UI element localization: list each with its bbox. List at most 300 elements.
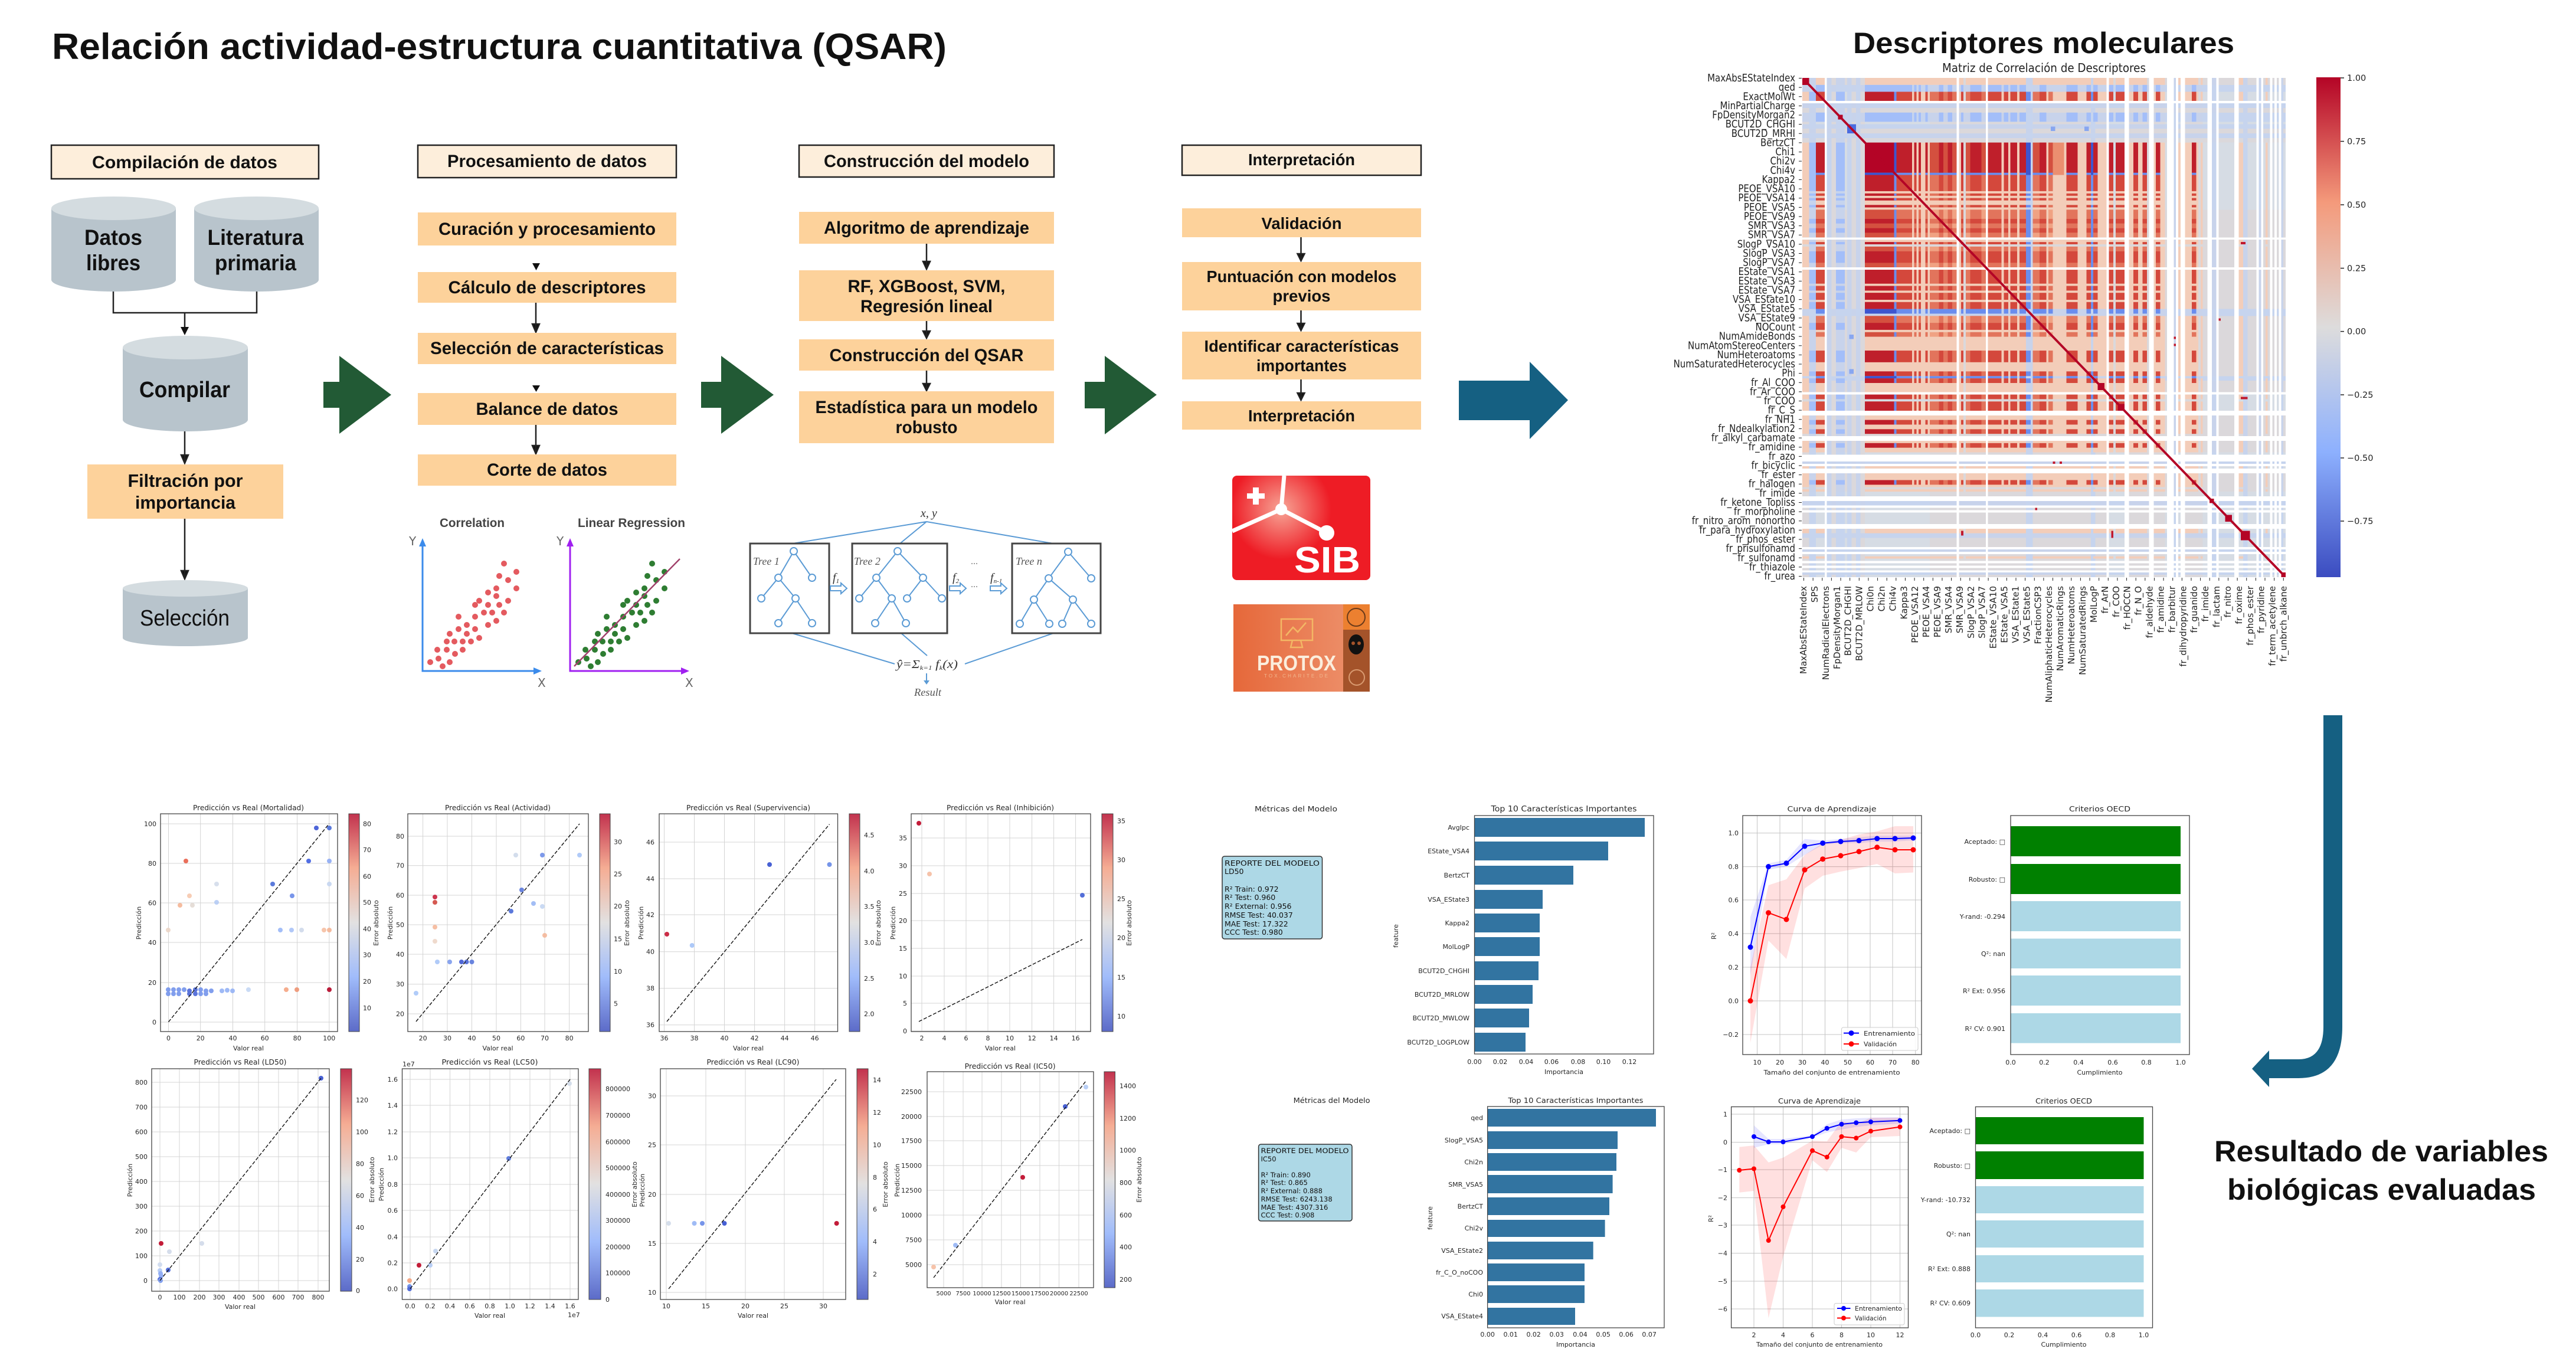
heatmap y labels: Chi1 xyxy=(1775,146,1795,158)
chart: predicción vs real LD50: 400 xyxy=(233,1294,246,1301)
heatmap y labels: fr_azo xyxy=(1769,450,1795,463)
box: algoritmos: RF, XGBoost, SVM, xyxy=(847,277,1006,296)
chart: predicción vs real supervivencia: 3.0 xyxy=(864,939,875,947)
heading: construcción del modelo: Construcción del modelo xyxy=(824,152,1029,171)
chart: predicción vs real LC90: 25 xyxy=(780,1302,788,1310)
box: estadística: robusto xyxy=(896,418,957,437)
box: algoritmos: Regresión lineal xyxy=(860,297,993,316)
chart: predicción vs real IC50: Error absoluto xyxy=(1135,1157,1143,1203)
chart: linear regression: Linear Regression xyxy=(578,516,685,530)
chart: predicción vs real actividad: Error absoluto xyxy=(623,900,631,946)
diagram: gradient boosting trees: k=1 xyxy=(920,664,932,672)
heatmap y labels: Chi2v xyxy=(1770,155,1795,167)
chart: top 10 características LD50: 0.10 xyxy=(1596,1058,1611,1066)
chart: top 10 características IC50: SMR_VSA5 xyxy=(1448,1181,1483,1189)
heatmap x labels: BCUT2D_CHGHI xyxy=(1843,586,1854,656)
chart: predicción vs real LD50: 100 xyxy=(174,1294,185,1301)
chart: curva de aprendizaje LD50: 1.0 xyxy=(1728,830,1739,837)
chart: predicción vs real actividad: Valor real xyxy=(482,1045,513,1052)
box: algoritmos xyxy=(799,270,1054,321)
chart: predicción vs real LC90: 6 xyxy=(873,1206,877,1213)
chart: predicción vs real mortalidad xyxy=(135,804,380,1052)
chart: predicción vs real LC50: 800000 xyxy=(605,1085,630,1093)
chart: criterios OECD IC50: Cumplimiento xyxy=(2041,1341,2087,1348)
chart: top 10 características LD50: BCUT2D_CHGHI xyxy=(1418,967,1469,975)
heatmap x labels: SlogP_VSA2 xyxy=(1966,586,1977,639)
chart: predicción vs real LC50: 100000 xyxy=(605,1269,630,1277)
chart: curva de aprendizaje LD50: 10 xyxy=(1753,1059,1761,1066)
chart: predicción vs real IC50: 600 xyxy=(1120,1212,1132,1219)
chart: predicción vs real IC50: 10000 xyxy=(973,1291,991,1297)
chart: curva de aprendizaje IC50: −2 xyxy=(1718,1194,1727,1202)
box: selección de características xyxy=(418,333,676,364)
arrow xyxy=(1297,237,1304,261)
chart: predicción vs real IC50: 15000 xyxy=(901,1162,922,1170)
heatmap y labels: SlogP_VSA3 xyxy=(1743,247,1795,260)
chart: predicción vs real supervivencia: 38 xyxy=(646,985,654,993)
heatmap y labels: fr_para_hydroxylation xyxy=(1699,524,1795,536)
chart: criterios OECD IC50: 0.4 xyxy=(2038,1331,2048,1339)
chart: criterios OECD IC50: Q²: nan xyxy=(1946,1230,1971,1238)
arrow xyxy=(532,425,539,454)
heatmap x labels: NumAromaticRings xyxy=(2055,586,2066,671)
chart: predicción vs real LD50: 800 xyxy=(135,1079,148,1086)
chart: predicción vs real inhibición: 15 xyxy=(1117,974,1125,981)
chart: predicción vs real inhibición: 8 xyxy=(986,1035,990,1042)
heatmap x labels: fr_COO xyxy=(2111,586,2122,617)
diagram: gradient boosting trees: k xyxy=(940,664,944,672)
heatmap y labels: fr_phos_ester xyxy=(1736,533,1795,546)
heatmap x labels: fr_nitro xyxy=(2223,586,2234,618)
heading: compilación de datos: Compilación de datos xyxy=(92,153,277,172)
panel: métricas LD50: R² External: 0.956 xyxy=(1225,902,1292,911)
arrow head xyxy=(181,327,189,335)
box: corte de datos: Corte de datos xyxy=(487,460,607,480)
chart: predicción vs real LC50: Error absoluto xyxy=(631,1161,639,1207)
box: curación y procesamiento xyxy=(418,212,676,245)
heatmap x labels: fr_term_acetylene xyxy=(2267,586,2279,666)
chart: predicción vs real IC50: 5000 xyxy=(905,1261,922,1269)
chart: predicción vs real supervivencia: Predicción vs Real (Supervivencia) xyxy=(686,804,810,812)
chart: criterios OECD LD50: 0.6 xyxy=(2107,1059,2118,1066)
chart: predicción vs real supervivencia xyxy=(637,804,882,1052)
chart: predicción vs real IC50: 7500 xyxy=(956,1291,970,1297)
heatmap x labels: SlogP_VSA7 xyxy=(1977,586,1988,639)
chart: criterios OECD LD50: R² Ext: 0.956 xyxy=(1963,987,2005,995)
chart: predicción vs real mortalidad: 60 xyxy=(363,873,371,880)
chart: curva de aprendizaje IC50: −5 xyxy=(1718,1278,1727,1285)
chart: predicción vs real supervivencia: 3.5 xyxy=(864,903,875,911)
chart: predicción vs real LC50: 1.0 xyxy=(505,1302,515,1310)
heatmap colorbar: −0.75 xyxy=(2347,517,2373,526)
chart: top 10 características IC50: 0.07 xyxy=(1642,1331,1657,1338)
diagram: gradient boosting trees: Tree n xyxy=(1016,555,1042,567)
heatmap x labels: SPS xyxy=(1809,586,1820,603)
chart: predicción vs real LD50: 100 xyxy=(135,1252,148,1260)
chart: predicción vs real actividad: 50 xyxy=(396,921,404,929)
panel: métricas LD50: MAE Test: 17.322 xyxy=(1225,919,1288,928)
chart: predicción vs real inhibición: 2 xyxy=(919,1035,924,1042)
heatmap y labels: fr_urea xyxy=(1764,570,1795,582)
chart: predicción vs real LC50: 0.6 xyxy=(387,1207,398,1214)
chart: predicción vs real mortalidad: 100 xyxy=(144,820,156,828)
heatmap y labels: fr_C_S xyxy=(1768,404,1795,417)
chart: correlation: X xyxy=(538,676,546,690)
heatmap y labels: PEOE_VSA10 xyxy=(1738,182,1795,195)
heatmap x labels: fr_barbitur xyxy=(2166,585,2178,633)
panel: métricas IC50: R² Train: 0.890 xyxy=(1261,1171,1311,1179)
heatmap y labels: fr_bicyclic xyxy=(1751,459,1795,472)
chart: linear regression: X xyxy=(685,676,693,690)
arrow xyxy=(923,321,930,338)
chart: predicción vs real inhibición: 30 xyxy=(1117,856,1125,864)
chart: correlation xyxy=(408,516,546,690)
chart: predicción vs real supervivencia: 2.5 xyxy=(864,975,875,983)
box: algoritmo de aprendizaje: Algoritmo de aprendizaje xyxy=(824,218,1029,238)
chart: criterios OECD IC50: R² Ext: 0.888 xyxy=(1928,1265,1971,1273)
chart: predicción vs real mortalidad: 0 xyxy=(152,1019,156,1026)
chart: predicción vs real LC50: 0.0 xyxy=(387,1285,398,1293)
chart: predicción vs real supervivencia: 4.5 xyxy=(864,832,875,839)
chart: predicción vs real LC50: 1e7 xyxy=(402,1060,415,1068)
chart: curva de aprendizaje LD50: 30 xyxy=(1798,1059,1806,1066)
chart: criterios OECD LD50: R² CV: 0.901 xyxy=(1965,1025,2005,1033)
chart: predicción vs real mortalidad: 80 xyxy=(293,1035,302,1042)
chart: curva de aprendizaje LD50: R² xyxy=(1710,932,1718,939)
chart: top 10 características IC50: 0.04 xyxy=(1573,1331,1588,1338)
chart: curva de aprendizaje LD50: 20 xyxy=(1776,1059,1784,1066)
chart: criterios OECD IC50: Robusto: □ xyxy=(1934,1162,1971,1170)
heatmap y labels: fr_prisulfonamd xyxy=(1726,542,1795,555)
panel: matriz de correlación xyxy=(1674,61,2373,703)
chart: predicción vs real actividad: 30 xyxy=(396,981,404,988)
heatmap x labels: fr_phos_ester xyxy=(2245,585,2256,646)
box: filtración por importancia: importancia xyxy=(135,492,236,513)
chart: top 10 características LD50: 0.12 xyxy=(1622,1058,1636,1066)
diagram: gradient boosting trees: (x) xyxy=(942,658,958,671)
chart: predicción vs real IC50: 400 xyxy=(1120,1243,1132,1251)
panel: compilación de datos xyxy=(51,145,319,646)
chart: predicción vs real actividad: 20 xyxy=(396,1010,404,1018)
heatmap y labels: PEOE_VSA5 xyxy=(1744,201,1795,214)
heatmap colorbar: −0.50 xyxy=(2347,454,2373,463)
chart: predicción vs real LC50: Predicción xyxy=(378,1168,385,1201)
chart: predicción vs real LC90: 10 xyxy=(873,1141,881,1149)
chart: predicción vs real IC50: 12500 xyxy=(992,1291,1011,1297)
logo: PROTOX xyxy=(1233,604,1370,692)
chart: predicción vs real IC50: 12500 xyxy=(901,1187,922,1194)
chart: predicción vs real inhibición: 14 xyxy=(1050,1035,1058,1042)
chart: predicción vs real actividad: Predicción vs Real (Actividad) xyxy=(445,804,551,812)
chart: predicción vs real LC50: 400000 xyxy=(605,1191,630,1199)
chart: predicción vs real mortalidad: 50 xyxy=(363,899,371,906)
chart: criterios OECD LD50: Criterios OECD xyxy=(2069,804,2130,813)
cylinder: datos libres: Datos xyxy=(84,225,142,250)
chart: curva de aprendizaje IC50: 1 xyxy=(1723,1111,1727,1118)
chart: predicción vs real LC50: 0.8 xyxy=(485,1302,495,1310)
chart: top 10 características LD50: Importancia xyxy=(1544,1068,1583,1076)
chart: predicción vs real LD50: 0 xyxy=(356,1287,360,1295)
chart: top 10 características LD50: EState_VSA4 xyxy=(1428,847,1469,855)
chart: predicción vs real IC50: 17500 xyxy=(901,1137,922,1145)
diagram: gradient boosting trees: ... xyxy=(971,556,978,567)
chart: predicción vs real LC50: 1.0 xyxy=(387,1154,398,1162)
box: filtración por importancia xyxy=(87,464,283,519)
chart: predicción vs real actividad: 60 xyxy=(396,892,404,899)
chart: predicción vs real IC50: 22500 xyxy=(901,1088,922,1096)
heatmap x labels: FractionCSP3 xyxy=(2032,586,2043,644)
heatmap y labels: Chi4v xyxy=(1770,164,1795,176)
panel: métricas IC50 xyxy=(1259,1096,1370,1221)
chart: predicción vs real mortalidad: 20 xyxy=(363,978,371,986)
heatmap colorbar: 0.50 xyxy=(2347,201,2366,210)
chart: curva de aprendizaje LD50: 0.4 xyxy=(1728,930,1739,938)
arrow xyxy=(1297,310,1304,330)
chart: predicción vs real LD50: 300 xyxy=(212,1294,225,1301)
chart: predicción vs real mortalidad: 40 xyxy=(229,1035,237,1042)
chart: top 10 características IC50: 0.01 xyxy=(1503,1331,1518,1338)
diagram: gradient boosting trees: f xyxy=(990,571,994,584)
chart: predicción vs real mortalidad: 20 xyxy=(148,979,156,987)
diagram: gradient boosting trees: Tree 1 xyxy=(753,555,780,567)
chart: predicción vs real actividad: 15 xyxy=(614,935,622,943)
logo: PROTOX: PROTOX xyxy=(1257,651,1336,675)
heatmap y labels: NOCount xyxy=(1756,321,1795,333)
panel: métricas LD50: REPORTE DEL MODELO xyxy=(1225,859,1320,867)
box: balance de datos xyxy=(418,393,676,425)
chart: predicción vs real inhibición: 25 xyxy=(1117,895,1125,903)
box: validación xyxy=(1182,208,1421,237)
chart: curva de aprendizaje IC50: 8 xyxy=(1839,1331,1844,1339)
heading: resultado de variables biológicas evaluadas: biológicas evaluadas xyxy=(2227,1173,2536,1206)
chart: predicción vs real IC50: 800 xyxy=(1120,1179,1132,1187)
panel: métricas LD50: CCC Test: 0.980 xyxy=(1225,928,1283,937)
heatmap y labels: VSA_EState5 xyxy=(1739,302,1795,315)
panel: métricas LD50: LD50 xyxy=(1225,867,1244,876)
heatmap y labels: VSA_EState9 xyxy=(1739,312,1795,325)
chart: top 10 características IC50: Importancia xyxy=(1556,1341,1595,1348)
chart: predicción vs real IC50 xyxy=(893,1062,1143,1306)
heatmap y labels: Phi xyxy=(1782,367,1795,379)
heatmap y labels: NumSaturatedHeterocycles xyxy=(1674,358,1795,370)
chart: curva de aprendizaje LD50: 60 xyxy=(1866,1059,1874,1066)
chart: predicción vs real supervivencia: 40 xyxy=(720,1035,728,1042)
chart: curva de aprendizaje LD50: 0.8 xyxy=(1728,863,1739,871)
panel: métricas IC50: R² Test: 0.865 xyxy=(1261,1179,1308,1187)
chart: curva de aprendizaje LD50: Tamaño del conjunto de entrenamiento xyxy=(1763,1069,1900,1076)
heading: resultado de variables biológicas evaluadas: Resultado de variables xyxy=(2214,1135,2548,1168)
heatmap x labels: fr_ArN xyxy=(2100,586,2111,614)
heatmap x labels: EState_VSA5 xyxy=(1999,586,2011,643)
heatmap y labels: fr_Ar_COO xyxy=(1750,385,1795,398)
panel: procesamiento de datos xyxy=(418,145,676,486)
chart: predicción vs real LC90: Valor real xyxy=(738,1312,768,1320)
chart: criterios OECD LD50 xyxy=(1959,804,2189,1076)
chart: curva de aprendizaje IC50: 6 xyxy=(1811,1331,1814,1339)
heatmap y labels: NumHeteroatoms xyxy=(1717,349,1795,361)
chart: criterios OECD LD50: Q²: nan xyxy=(1981,950,2005,958)
diagram: gradient boosting trees: Tree 2 xyxy=(854,555,881,567)
chart: top 10 características LD50 xyxy=(1392,805,1654,1076)
heatmap y labels: PEOE_VSA9 xyxy=(1744,210,1795,223)
chart: predicción vs real LC50: Predicción vs Real (LC50) xyxy=(441,1058,538,1066)
chart: predicción vs real inhibición: 10 xyxy=(1006,1035,1014,1042)
arrow xyxy=(532,385,540,392)
chart: top 10 características IC50: Chi2n xyxy=(1464,1158,1483,1166)
chart: predicción vs real LD50: 800 xyxy=(312,1294,325,1301)
chart: curva de aprendizaje IC50: 12 xyxy=(1896,1331,1904,1339)
chart: predicción vs real LC90: 14 xyxy=(873,1076,881,1084)
heatmap y labels: fr_alkyl_carbamate xyxy=(1711,431,1795,444)
chart: curva de aprendizaje LD50: Entrenamiento xyxy=(1864,1030,1915,1037)
heatmap x labels: Kappa3 xyxy=(1899,586,1909,620)
chart: predicción vs real LC50: 0 xyxy=(605,1296,610,1304)
chart: top 10 características LD50: BCUT2D_MWLOW xyxy=(1413,1014,1469,1022)
chart: predicción vs real IC50: 20000 xyxy=(1050,1291,1068,1297)
box: identificar características: importantes xyxy=(1256,356,1347,375)
diagram: gradient boosting trees: ŷ=Σ xyxy=(896,658,917,671)
heatmap x labels: fr_unbrch_alkane xyxy=(2279,586,2290,662)
chart: predicción vs real inhibición: 12 xyxy=(1028,1035,1036,1042)
chart: linear regression xyxy=(556,516,693,690)
heatmap y labels: MinPartialCharge xyxy=(1720,100,1795,112)
chart: predicción vs real mortalidad: 40 xyxy=(363,925,371,933)
arrow xyxy=(923,371,930,391)
box: cálculo de descriptores: Cálculo de descriptores xyxy=(449,278,646,297)
chart: predicción vs real LC50: 0.2 xyxy=(425,1302,436,1310)
heatmap x labels: PEOE_VSA12 xyxy=(1910,586,1921,643)
chart: predicción vs real IC50: 5000 xyxy=(937,1291,951,1297)
chart: curva de aprendizaje IC50: Curva de Aprendizaje xyxy=(1778,1097,1861,1105)
chart: predicción vs real LC90: 15 xyxy=(648,1240,656,1248)
chart: predicción vs real LD50: 200 xyxy=(194,1294,205,1301)
chart: predicción vs real inhibición: Error absoluto xyxy=(1125,900,1133,946)
chart: predicción vs real LC90: Predicción xyxy=(639,1174,646,1207)
heatmap colorbar: −0.25 xyxy=(2347,391,2373,400)
heatmap x labels: NumRadicalElectrons xyxy=(1821,586,1831,680)
chart: predicción vs real LC50: 1.2 xyxy=(387,1128,398,1136)
heatmap x labels: fr_lactam xyxy=(2211,586,2223,627)
chart: predicción vs real supervivencia: Error absoluto xyxy=(875,900,882,946)
arrow: construcción a interpretación xyxy=(1085,356,1157,434)
chart: predicción vs real mortalidad: Predicción xyxy=(135,906,143,939)
heatmap x labels: PEOE_VSA4 xyxy=(1921,586,1932,637)
heatmap y labels: fr_morpholine xyxy=(1734,505,1795,518)
heatmap x labels: fr_guanido xyxy=(2189,586,2200,633)
chart: top 10 características IC50: VSA_EState4 xyxy=(1441,1312,1483,1320)
chart: predicción vs real LC50: 0.4 xyxy=(387,1233,398,1241)
chart: predicción vs real LD50: 200 xyxy=(135,1227,148,1235)
diagram: gradient boosting trees: 2 xyxy=(956,578,960,585)
chart: predicción vs real supervivencia: 40 xyxy=(646,948,654,956)
heatmap y labels: SlogP_VSA7 xyxy=(1743,256,1795,269)
arrow xyxy=(532,303,539,332)
chart: top 10 características LD50: feature xyxy=(1392,924,1400,948)
chart: predicción vs real actividad: 5 xyxy=(614,1000,618,1008)
chart: top 10 características LD50: 0.00 xyxy=(1467,1058,1482,1066)
chart: predicción vs real IC50: 20000 xyxy=(901,1113,922,1121)
heatmap y labels: qed xyxy=(1779,81,1795,93)
chart: predicción vs real LC90: 25 xyxy=(648,1141,656,1149)
chart: top 10 características IC50: Chi2v xyxy=(1465,1225,1483,1232)
chart: predicción vs real inhibición: 10 xyxy=(1117,1013,1125,1020)
chart: predicción vs real actividad: 80 xyxy=(396,833,404,840)
chart: predicción vs real mortalidad: 80 xyxy=(148,860,156,867)
chart: predicción vs real inhibición: 0 xyxy=(903,1027,907,1035)
chart: predicción vs real actividad: 25 xyxy=(614,870,622,878)
cylinder: literatura primaria xyxy=(194,197,319,292)
chart: predicción vs real LC50: 0.6 xyxy=(464,1302,475,1310)
chart: predicción vs real inhibición: 30 xyxy=(899,862,907,870)
chart: predicción vs real LD50: 0 xyxy=(158,1294,162,1301)
chart: predicción vs real LC90: 8 xyxy=(873,1174,877,1181)
box: selección de características: Selección de características xyxy=(430,339,664,358)
panel: métricas LD50: RMSE Test: 40.037 xyxy=(1225,911,1293,919)
chart: predicción vs real LC90: 30 xyxy=(819,1302,827,1310)
box: construcción del QSAR: Construcción del QSAR xyxy=(830,346,1024,365)
chart: predicción vs real LC50: 1.2 xyxy=(525,1302,535,1310)
chart: predicción vs real LC90: 15 xyxy=(702,1302,710,1310)
chart: criterios OECD LD50: 0.2 xyxy=(2039,1059,2050,1066)
chart: predicción vs real LC90: 12 xyxy=(873,1109,881,1117)
diagram: gradient boosting trees: f xyxy=(833,571,836,584)
chart: predicción vs real LC50: 500000 xyxy=(605,1164,630,1172)
chart: predicción vs real inhibición: 25 xyxy=(899,890,907,898)
chart: predicción vs real mortalidad: 60 xyxy=(261,1035,269,1042)
heatmap x labels: fr_dihydropyridine xyxy=(2178,586,2189,667)
chart: correlation: Correlation xyxy=(440,516,505,530)
heatmap x labels: FpDensityMorgan1 xyxy=(1832,586,1842,669)
chart: predicción vs real IC50: 17500 xyxy=(1030,1291,1049,1297)
chart: predicción vs real mortalidad: Valor real xyxy=(233,1045,264,1052)
chart: predicción vs real LC50: 1.6 xyxy=(387,1076,398,1083)
chart: predicción vs real inhibición: Predicción vs Real (Inhibición) xyxy=(947,804,1054,812)
chart: criterios OECD IC50: R² CV: 0.609 xyxy=(1930,1299,1971,1307)
chart: predicción vs real LC50: 600000 xyxy=(605,1138,630,1146)
arrow xyxy=(1297,379,1304,400)
chart: correlation: Y xyxy=(408,534,417,548)
chart: curva de aprendizaje LD50: Validación xyxy=(1864,1040,1897,1048)
chart: predicción vs real LC90: 2 xyxy=(873,1271,877,1278)
heatmap y labels: fr_amidine xyxy=(1749,441,1795,454)
chart: predicción vs real LC50: 1e7 xyxy=(568,1311,580,1319)
chart: predicción vs real supervivencia: 44 xyxy=(781,1035,789,1042)
heatmap y labels: fr_imide xyxy=(1759,487,1795,500)
chart: top 10 características LD50: 0.06 xyxy=(1544,1058,1559,1066)
panel: métricas LD50: Métricas del Modelo xyxy=(1255,804,1337,813)
chart: predicción vs real IC50: 1000 xyxy=(1120,1147,1136,1154)
diagram: gradient boosting trees: n-1 xyxy=(994,578,1002,585)
box: interpretación: Interpretación xyxy=(1248,407,1355,425)
chart: top 10 características IC50: feature xyxy=(1426,1206,1434,1230)
heatmap y labels: BertzCT xyxy=(1760,136,1796,149)
chart: curva de aprendizaje IC50: 2 xyxy=(1752,1331,1756,1339)
heatmap x labels: VSA_EState1 xyxy=(2010,586,2021,643)
chart: curva de aprendizaje LD50: Curva de Aprendizaje xyxy=(1787,804,1877,813)
chart: predicción vs real LC50: 200000 xyxy=(605,1243,630,1251)
chart: predicción vs real inhibición: Valor real xyxy=(985,1045,1016,1052)
chart: predicción vs real LC50: 300000 xyxy=(605,1217,630,1225)
chart: predicción vs real supervivencia: Valor real xyxy=(733,1045,764,1052)
chart: predicción vs real supervivencia: 36 xyxy=(646,1022,654,1029)
chart: curva de aprendizaje LD50 xyxy=(1710,804,1922,1076)
heading: resultado de variables biológicas evaluadas xyxy=(2214,1135,2548,1206)
chart: criterios OECD LD50: Aceptado: □ xyxy=(1964,838,2005,846)
heatmap y labels: VSA_EState10 xyxy=(1733,293,1795,306)
heatmap xyxy=(1802,78,2286,577)
heatmap colorbar xyxy=(2316,74,2373,577)
panel: interpretación xyxy=(1182,145,1421,430)
